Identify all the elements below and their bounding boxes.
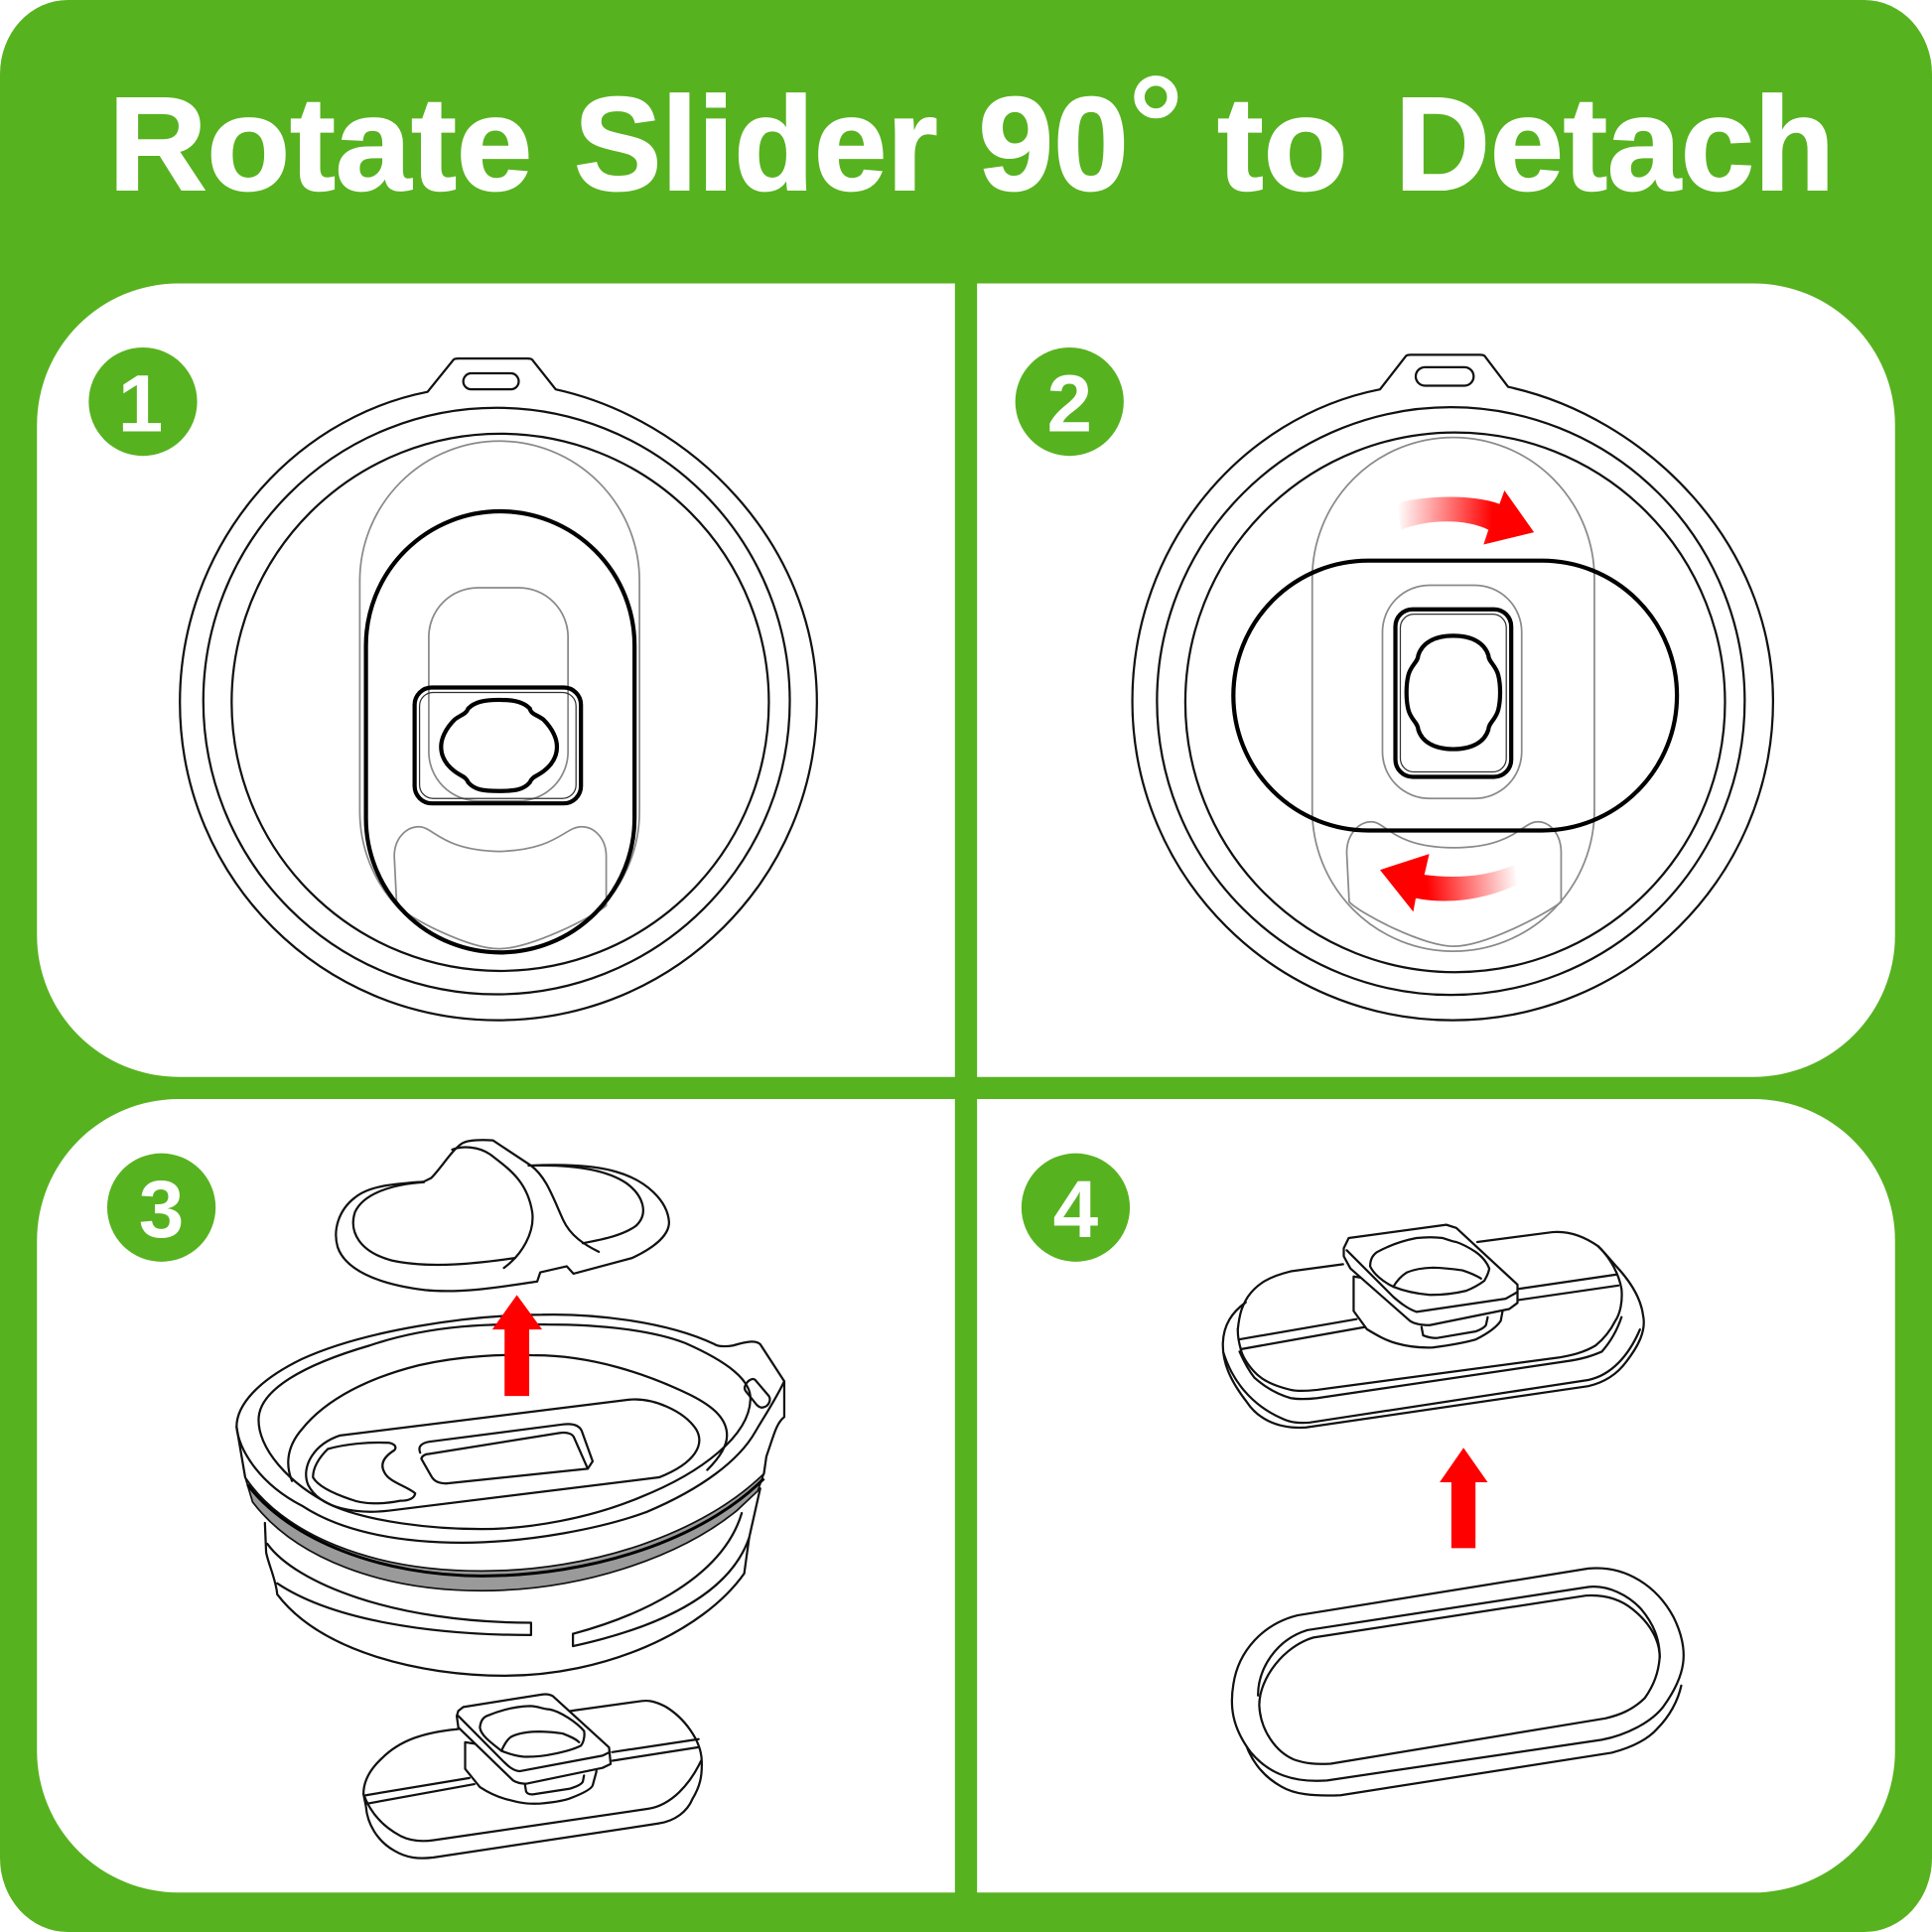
step badge 3: 3 [139,1165,184,1255]
slider knob [415,688,581,803]
lid top view [1133,354,1773,1021]
panel 4: remove gasket from slider [977,1099,1895,1892]
slider capsule horizontal [1233,561,1677,830]
arrow up to slider [1440,1448,1487,1548]
step badge 2: 2 [1046,358,1092,449]
slider cap lifted [336,1140,669,1291]
step badge 1: 1 [118,358,163,449]
step badge 3 [107,1154,215,1262]
step badge 4: 4 [1053,1165,1099,1255]
step badge 4 [1022,1154,1130,1262]
slider knob [1396,610,1511,776]
lid top view [180,358,817,1021]
title [108,47,1835,218]
slider capsule vertical [366,511,634,952]
title: Slider [574,70,937,218]
title: 90 [978,70,1129,218]
gasket ring [1232,1568,1684,1796]
panel 1: slider in closed position [37,283,955,1077]
arrow: rotate left, bottom [1380,854,1517,911]
title: Detach [1395,70,1835,218]
slider knob with gasket [1223,1225,1644,1428]
arrow up to cap [492,1295,542,1396]
panel 2: slider rotated 90 degrees [977,283,1895,1077]
title: ° [1128,47,1183,203]
gray gasket band [245,1473,763,1590]
step badge 2 [1016,347,1124,456]
title: Rotate [108,70,532,218]
arrow: rotate right, top [1397,490,1534,545]
lid perspective view [236,1314,784,1676]
panel 3: remove slider from lid [37,1099,955,1892]
step badge 1 [88,347,198,456]
slider knob piece [363,1694,702,1859]
title: to [1217,70,1348,218]
